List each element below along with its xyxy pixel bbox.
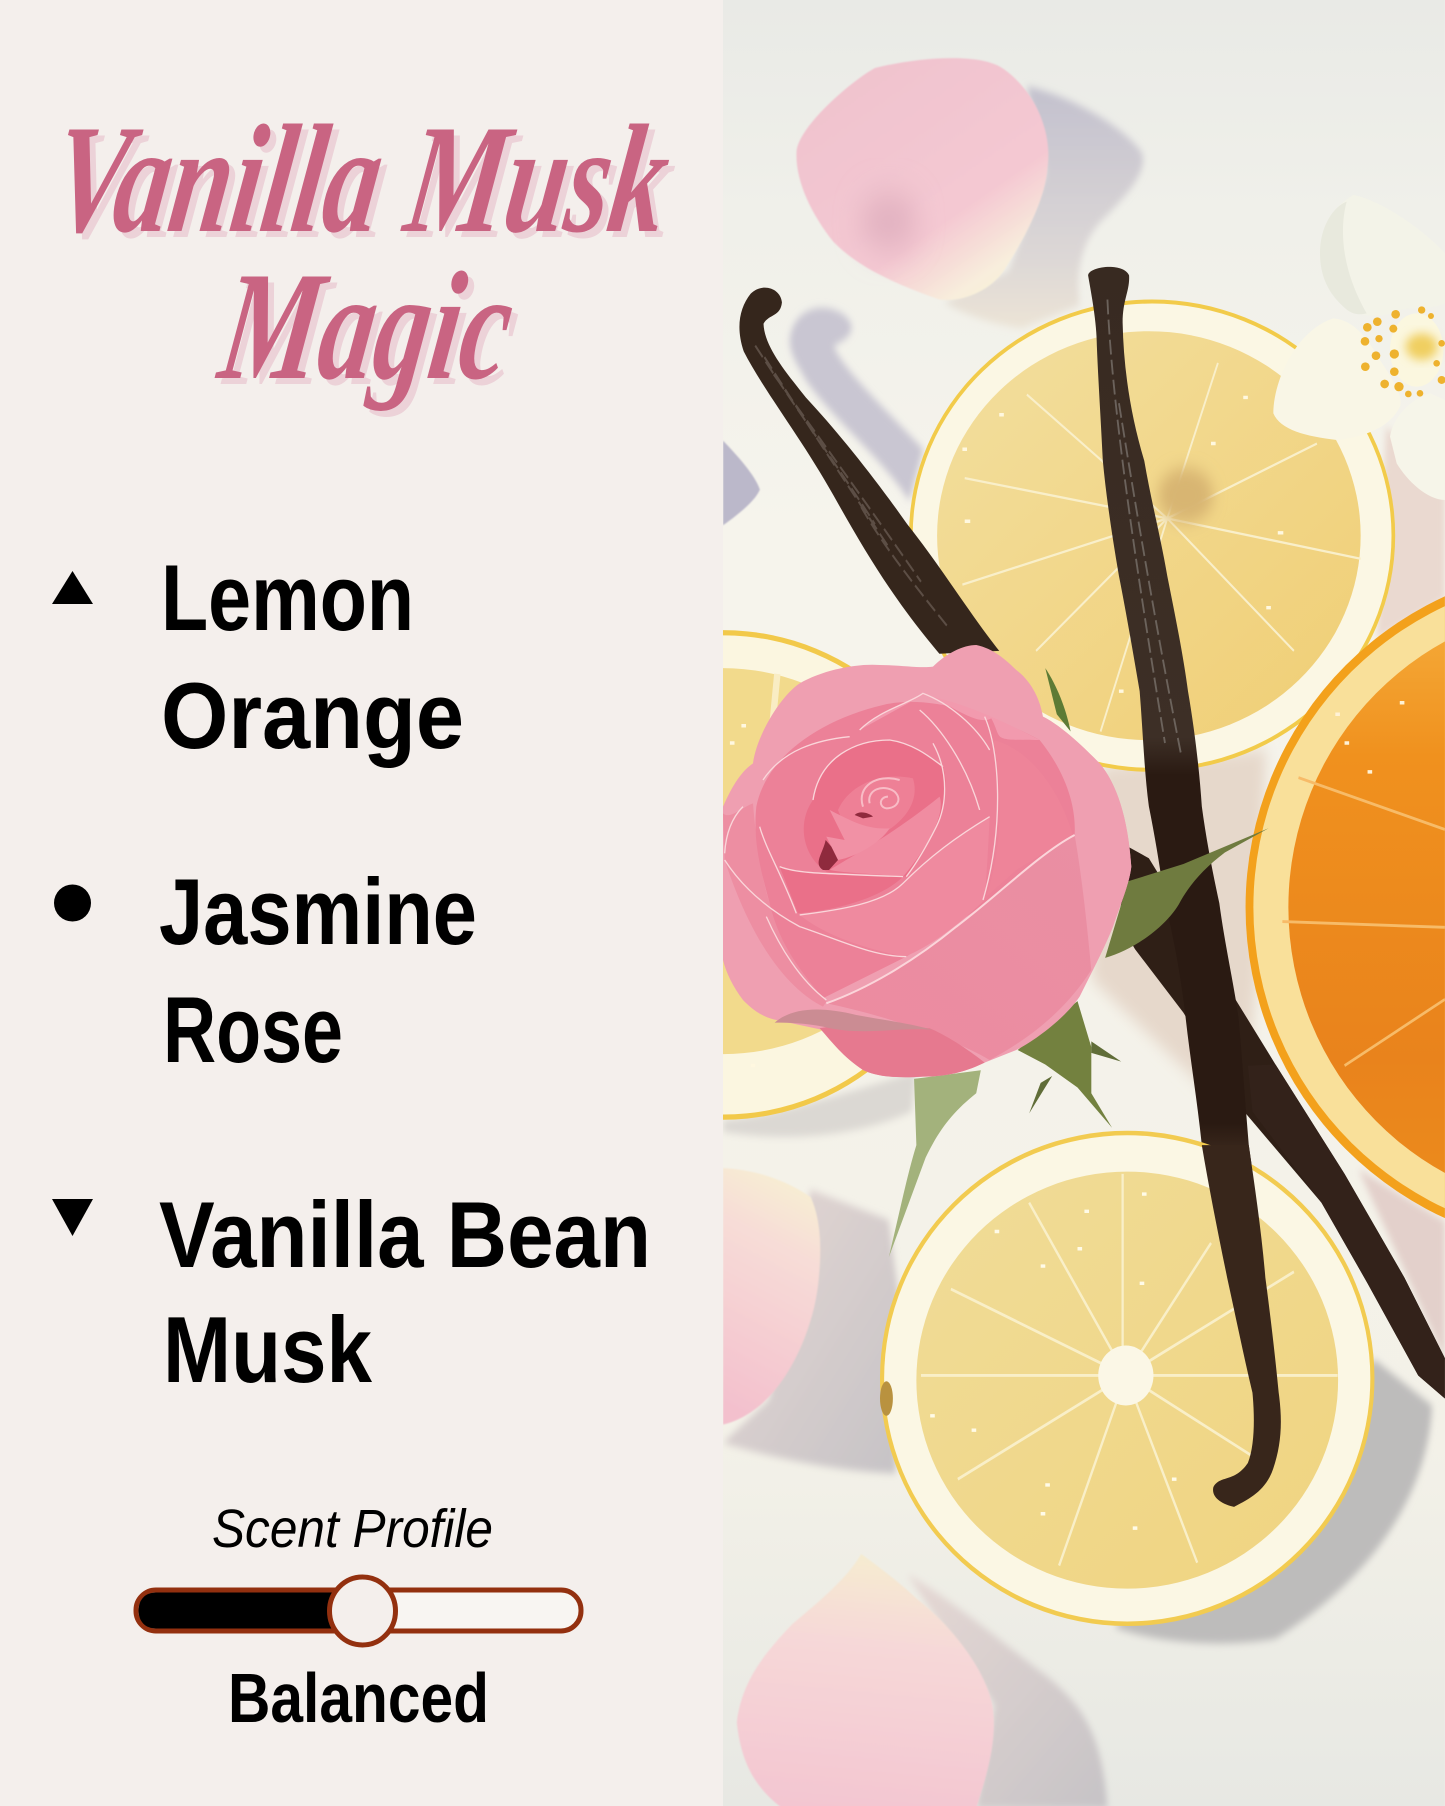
- rose left lower petals: [723, 803, 826, 1007]
- jasmine flower: [1273, 195, 1445, 500]
- shadow: under left lemon: [723, 1071, 916, 1137]
- photo base layers: [723, 0, 1445, 1806]
- orange slice: [1246, 565, 1445, 1249]
- sepal right: [1018, 1001, 1112, 1128]
- jasmine top petal: [1320, 195, 1445, 316]
- vanilla bean: left: [739, 288, 999, 654]
- icon: circle: [54, 884, 91, 922]
- middle note: rose: Rose: [163, 977, 343, 1082]
- rose centre bud: [838, 776, 915, 836]
- shadow: center under rose: [1091, 749, 1266, 1094]
- jasmine bottom petal: [1390, 429, 1445, 500]
- base note: musk: Musk: [163, 1297, 373, 1402]
- jasmine left petal: [1273, 346, 1370, 440]
- middle note: jasmine: Jasmine: [159, 859, 477, 964]
- rose: [723, 645, 1131, 1077]
- title line 2: Magic: [209, 240, 523, 412]
- top note: lemon: Lemon: [161, 545, 414, 650]
- petal: top: [796, 58, 1048, 300]
- jasmine petal shading: [1320, 202, 1367, 314]
- lemon slice: top: [909, 300, 1395, 772]
- photo panel: ingredients: [723, 0, 1445, 1806]
- shadow: left edge fragment: [723, 441, 760, 525]
- shadow: lemon top right: [1377, 426, 1445, 639]
- rose front petal edge: [826, 835, 1075, 1003]
- scent profile slider block: [136, 1499, 581, 1737]
- shadow: bottom petal: [907, 1574, 1107, 1806]
- slider filled portion: [138, 1592, 340, 1628]
- rose right inner petal: [986, 740, 1073, 897]
- shadow: top petal: [944, 86, 1143, 328]
- base note: vanilla bean: Vanilla Bean: [159, 1182, 651, 1287]
- vanilla bean: center: [1088, 266, 1252, 1164]
- rose mid petal: [800, 817, 990, 957]
- title: [43, 93, 685, 418]
- left panel background: [0, 0, 723, 1806]
- shadow: bottom lemon: [1114, 1359, 1432, 1643]
- rose lower petal: [820, 1026, 985, 1077]
- balanced label: Balanced: [228, 1659, 489, 1737]
- lemon slice: left, under rose: [723, 630, 868, 1120]
- title shadow line 1: Vanilla Musk: [49, 99, 685, 271]
- rose outline: [723, 645, 1131, 1077]
- rose lower mid petal: [780, 867, 903, 913]
- icon: triangle down: [52, 1199, 93, 1236]
- petal: bottom: [737, 1554, 994, 1806]
- rose centre tip petals: [826, 810, 890, 860]
- vanilla bean: lower, behind: [1119, 847, 1445, 1399]
- sepal thorn: [1029, 1041, 1121, 1113]
- sepal bottom: [889, 1070, 981, 1257]
- rose top inner petal: [860, 693, 1040, 740]
- rose right outer petal: [1043, 717, 1131, 970]
- rose petal edges: [725, 693, 998, 1000]
- icon: triangle up: [52, 571, 93, 604]
- jasmine center: [1390, 313, 1443, 387]
- slider track: [136, 1590, 581, 1631]
- photo background: [723, 0, 1445, 1806]
- rose sepals: [889, 668, 1121, 1257]
- rose centre petal: [830, 797, 941, 877]
- rose front petal: [826, 835, 1091, 1060]
- rose inner bowl: [804, 740, 946, 877]
- jasmine anther core: [1406, 333, 1438, 360]
- jasmine stamens: [1361, 306, 1445, 397]
- vanilla bean: center, lower part over bottom lemon: [1202, 1145, 1281, 1507]
- top notes group: [52, 545, 464, 768]
- rose middle layer: [755, 702, 1075, 998]
- scent profile label: Scent Profile: [212, 1499, 493, 1559]
- shadows: [723, 86, 1445, 1806]
- petal: left: [723, 1168, 820, 1424]
- shadow: right of orange: [1358, 1169, 1445, 1359]
- rose dark centre: [819, 812, 873, 870]
- slider knob: [330, 1577, 396, 1645]
- shadow: left vanilla bean: [790, 308, 923, 501]
- lemon slice: bottom: [880, 1131, 1374, 1626]
- shadow: left petal: [723, 1189, 900, 1473]
- sliver sepal: [1045, 668, 1071, 732]
- middle notes group: [54, 859, 477, 1082]
- rose dry petal band: [775, 1009, 933, 1031]
- base notes group: [52, 1182, 651, 1402]
- rose leaf: right: [1105, 828, 1269, 958]
- title line 1: Vanilla Musk: [43, 93, 679, 265]
- vanilla bean: lower, over bottom lemon edge: [1276, 1064, 1445, 1398]
- rose spiral: [862, 778, 900, 808]
- top note: orange: Orange: [161, 663, 464, 768]
- title shadow line 2: Magic: [215, 246, 529, 418]
